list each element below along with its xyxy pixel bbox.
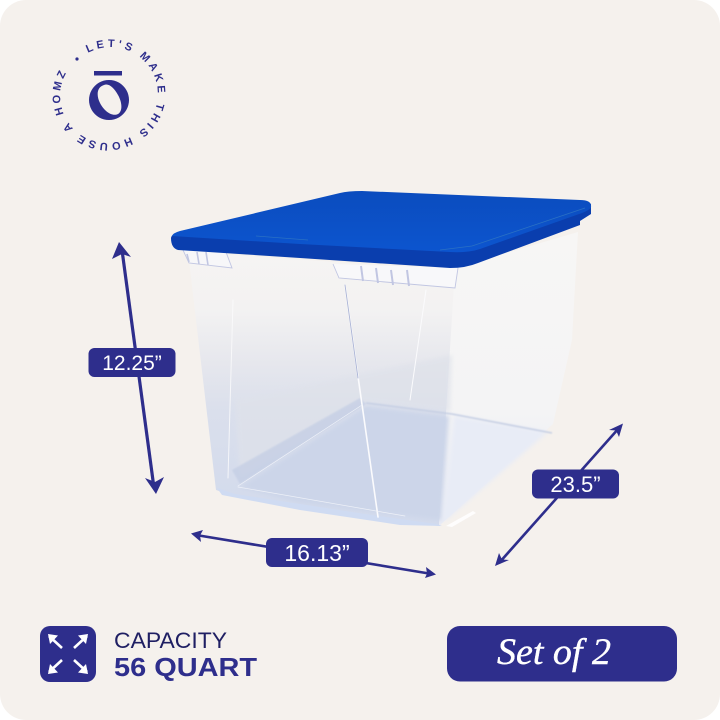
capacity text	[114, 628, 257, 682]
bin front-left face	[188, 252, 456, 526]
set of 2 badge: Set of 2	[497, 632, 611, 673]
dimension: depth	[495, 424, 623, 566]
depth arrow	[495, 424, 623, 566]
bin lid handle right	[333, 264, 458, 288]
depth label	[532, 470, 619, 498]
logo badge	[52, 39, 166, 151]
width arrow	[191, 530, 436, 578]
bin back wall tint	[235, 355, 452, 478]
bin lid edge	[171, 204, 591, 268]
bin lid handle left	[183, 250, 232, 268]
bin front ridge lines	[228, 285, 426, 517]
depth label: 23.5”	[550, 472, 601, 497]
icon: expand arrows	[40, 626, 96, 682]
height label	[88, 348, 176, 377]
dimension: width	[191, 530, 436, 578]
bin white corner foot	[446, 511, 476, 527]
bin lid embossed rim	[256, 208, 585, 250]
slogan dot	[75, 57, 79, 61]
bin floor light part	[444, 416, 548, 522]
bin right face	[439, 232, 578, 526]
bin floor shaded part	[240, 406, 449, 520]
logo mark ring	[89, 80, 129, 120]
dimension: height	[88, 242, 176, 494]
height arrow	[112, 242, 164, 494]
width label	[266, 538, 368, 567]
logo mark bar	[94, 71, 122, 76]
height label: 12.25”	[102, 352, 162, 375]
capacity text: 56 QUART	[114, 652, 257, 682]
capacity text: CAPACITY	[114, 628, 227, 653]
bin front edge	[217, 488, 442, 526]
bin back floor edge	[366, 403, 552, 433]
bin lid top	[172, 191, 591, 252]
width label: 16.13”	[284, 540, 350, 566]
bin inner fold	[232, 398, 366, 484]
circular slogan: LET'S MAKE THIS HOUSE A HOMZ	[52, 39, 166, 151]
set of 2 badge	[447, 626, 677, 682]
storage bin photo	[171, 191, 591, 527]
